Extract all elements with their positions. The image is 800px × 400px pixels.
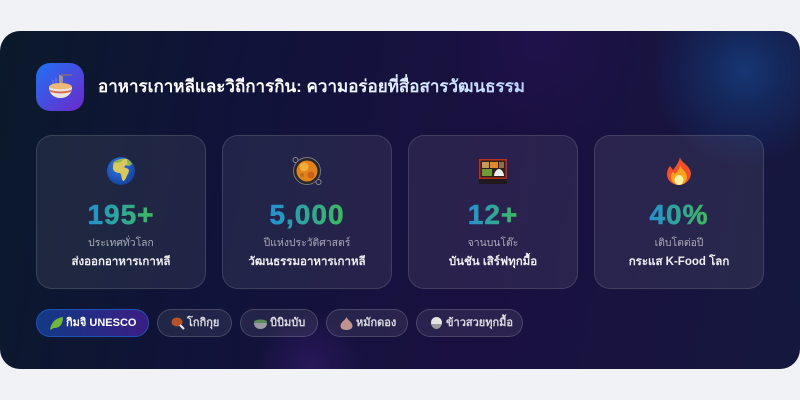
icon: noodle bowl bbox=[36, 63, 84, 111]
stat number: 5,000 bbox=[269, 199, 345, 230]
tag: pickled garlic bbox=[326, 309, 408, 337]
tag: bibimbap bbox=[240, 309, 318, 337]
tag: pickled garlic: หมักดอง bbox=[356, 317, 396, 329]
tag: rice: ข้าวสวยทุกมื้อ bbox=[446, 317, 513, 329]
tag: tteokguk bbox=[157, 309, 232, 337]
tag: rice bbox=[416, 309, 523, 337]
icon: globe bbox=[107, 157, 135, 185]
icon: bento box bbox=[479, 159, 507, 184]
stat description: เติบโตต่อปี bbox=[655, 238, 703, 249]
stat label: วัฒนธรรมอาหารเกาหลี bbox=[248, 256, 366, 268]
icon: flame bbox=[667, 157, 691, 185]
tag: bibimbap: บิบิมบับ bbox=[270, 317, 305, 329]
stat label: ส่งออกอาหารเกาหลี bbox=[72, 256, 170, 268]
panel: stat card 2 bbox=[222, 135, 392, 289]
stat number: 12+ bbox=[468, 199, 518, 230]
tag: tteokguk: โกกิกุย bbox=[187, 317, 219, 329]
stat description: ปีแห่งประวัติศาสตร์ bbox=[264, 238, 350, 249]
stat number: 195+ bbox=[87, 199, 155, 230]
icon: stew pot bbox=[292, 157, 322, 185]
stat number: 40% bbox=[649, 199, 709, 230]
panel: stat card 3 bbox=[408, 135, 578, 289]
stat description: จานบนโต๊ะ bbox=[468, 238, 518, 249]
title: อาหารเกาหลีและวิถีการกิน: ความอร่อยที่สื่อสารวัฒนธรรม bbox=[98, 77, 525, 96]
tag: kimchi UNESCO: กิมจิ UNESCO bbox=[66, 317, 136, 329]
panel: stat card 1 bbox=[36, 135, 206, 289]
stat label: กระแส K-Food โลก bbox=[629, 256, 729, 268]
stat label: บันชัน เสิร์ฟทุกมื้อ bbox=[449, 256, 537, 268]
tag: kimchi UNESCO bbox=[36, 309, 149, 337]
stat description: ประเทศทั่วโลก bbox=[88, 238, 154, 249]
panel: stat card 4 bbox=[594, 135, 764, 289]
